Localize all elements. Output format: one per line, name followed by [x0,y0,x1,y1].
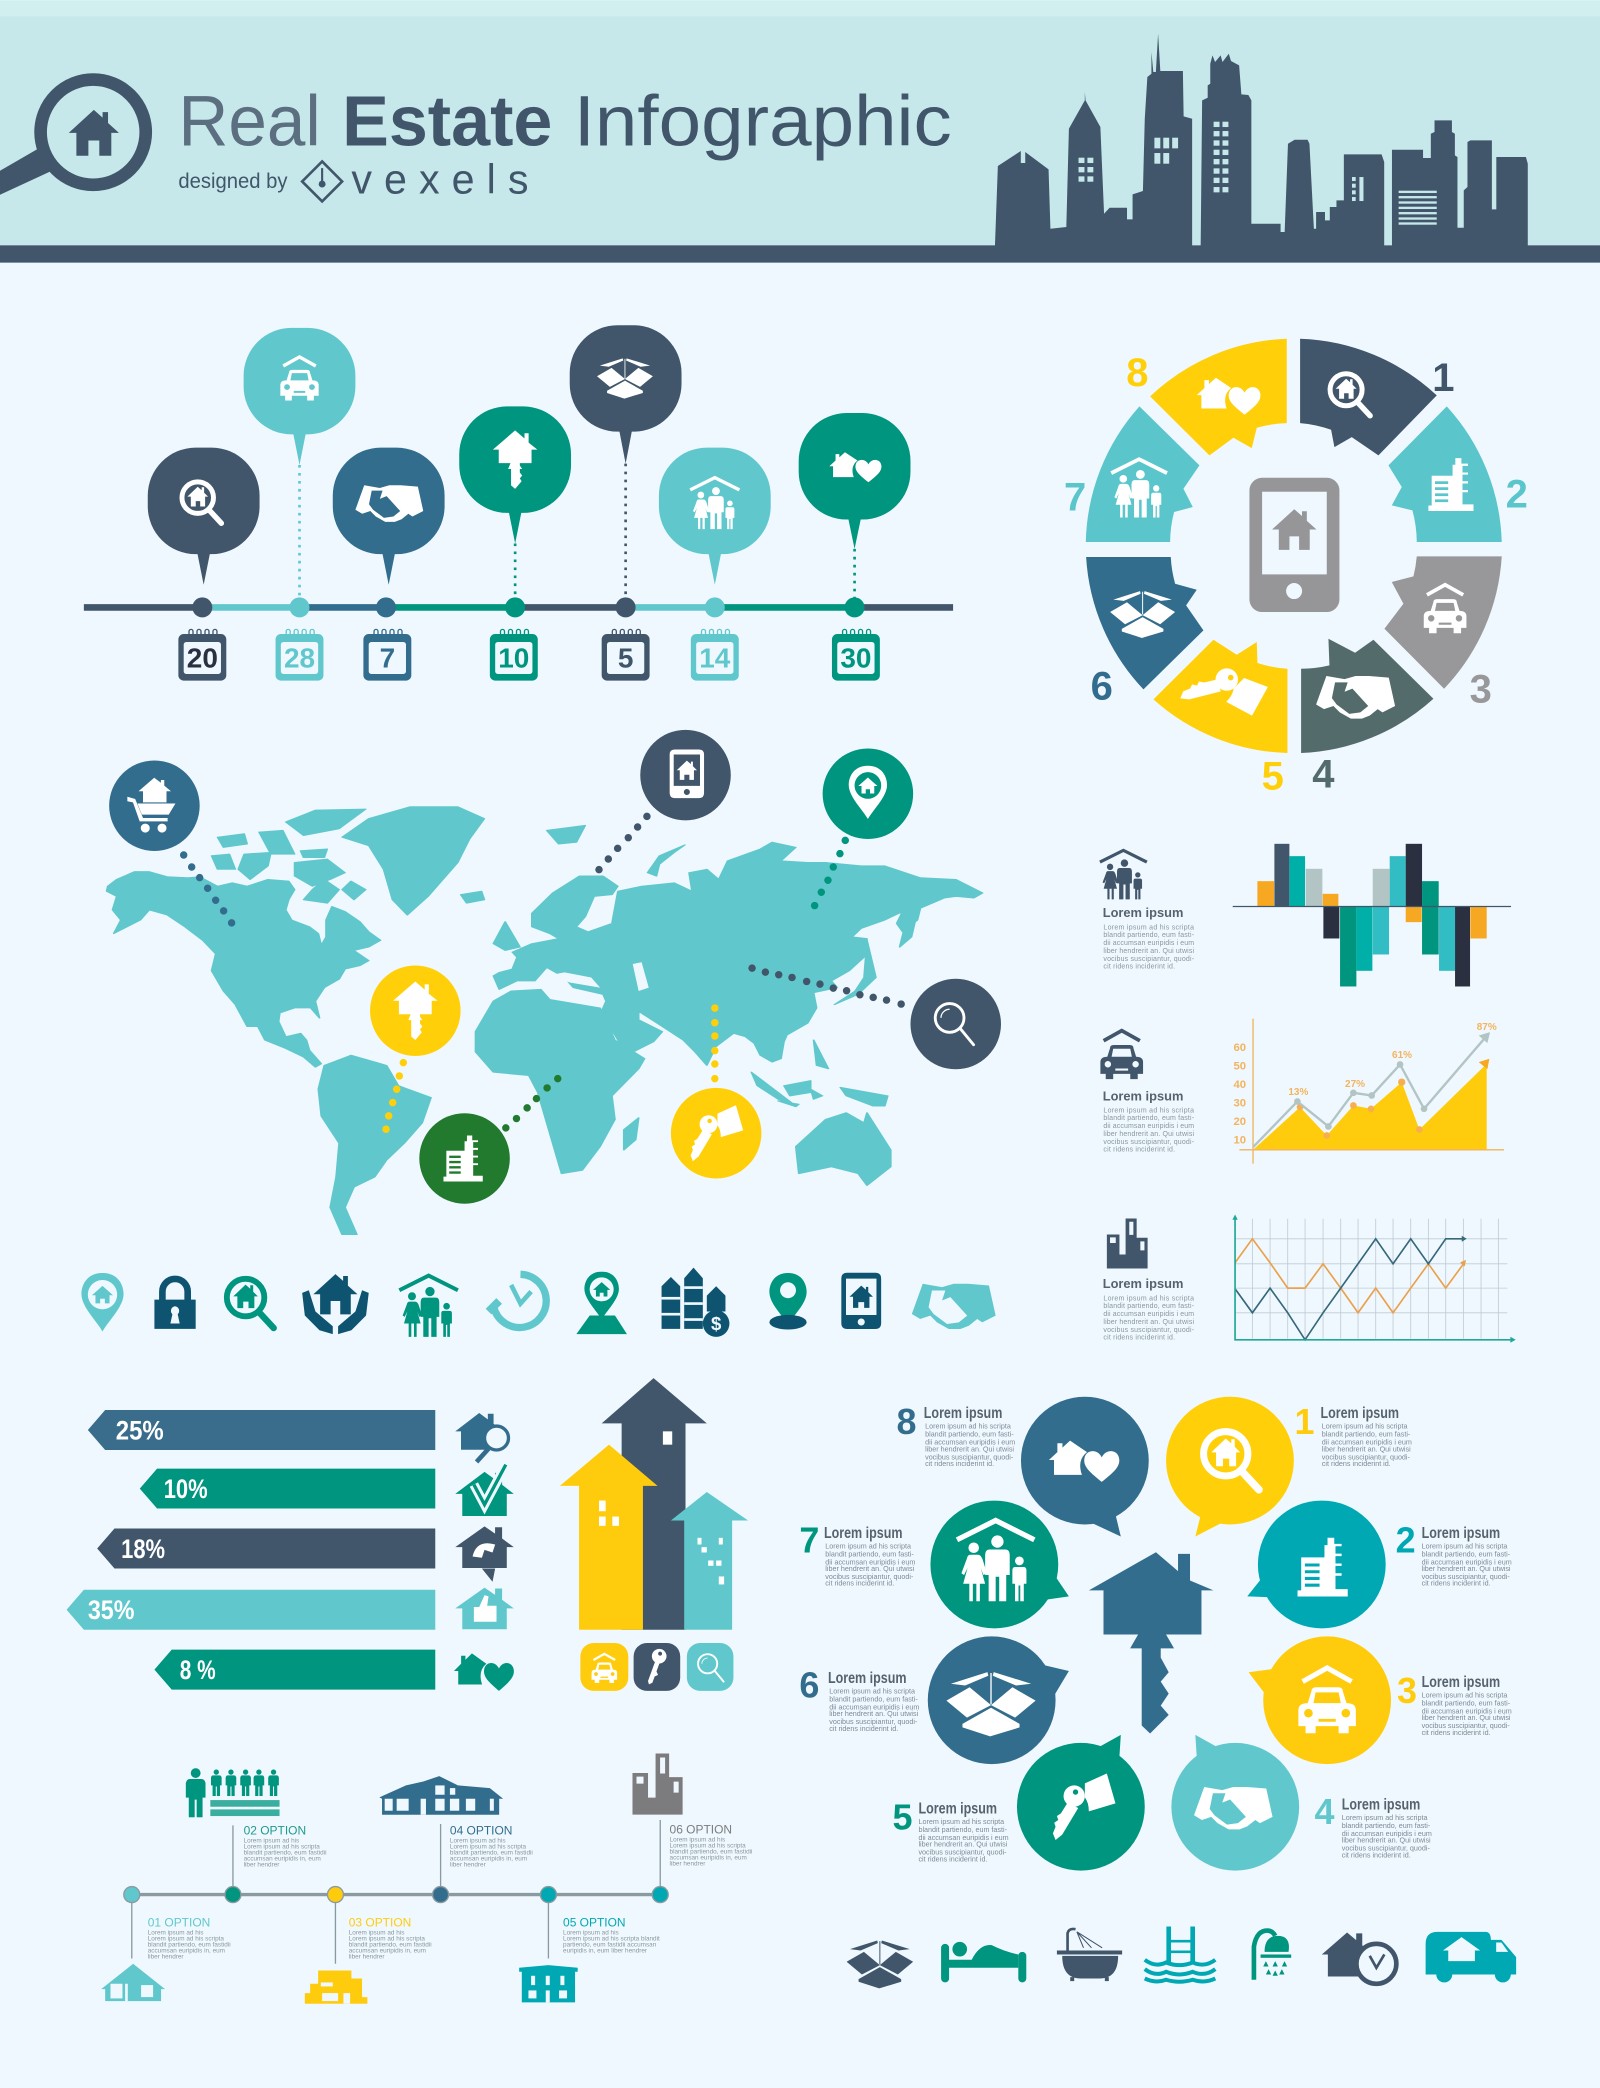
continents [107,807,983,1234]
option 02: liber hendrer [244,1862,280,1869]
option 03: Lorem ipsum ad his scripta [349,1936,425,1943]
bar: 25% [88,1410,435,1450]
bubble: house key [459,406,571,617]
icon: mansion [379,1776,503,1815]
icon: house with check [455,1465,514,1516]
block 1 [1100,850,1195,970]
option 02 [244,1824,327,1869]
center phone [1249,478,1339,612]
option 04: accumsan euripidis in, eum [450,1856,527,1863]
option 04: Lorem ipsum ad his [450,1838,506,1845]
label 3: dii accumsan euripidis i eum [1422,1708,1512,1716]
icon: house with thumb [455,1588,514,1629]
label 5: Lorem ipsum [918,1800,997,1817]
option 06 [670,1822,752,1867]
block 3: Lorem ipsum ad his scripta [1103,1295,1194,1302]
icon: house with magnifier [455,1413,508,1462]
option 05: euripidis in, eum liber hendrer [563,1947,648,1954]
label 4: cit ridens inciderint id. [1342,1851,1411,1859]
label 7: vocibus suscipiantur, quodi- [825,1573,914,1581]
timeline axis [84,605,953,610]
label 6: liber hendrerit an. Qui utwisi [829,1710,919,1718]
timeline with pin bubbles [84,325,953,681]
label 2: vocibus suscipiantur, quodi- [1422,1573,1510,1581]
calendar: 7: 7 [380,642,395,673]
label 6 [799,1665,919,1733]
label 7: Lorem ipsum [824,1525,902,1542]
calendar: 10: 10 [498,642,529,673]
label 4: blandit partiendo, eum fasti- [1342,1822,1431,1830]
segment 7: 7 [1064,475,1086,519]
label 8: Lorem ipsum ad his scripta [925,1423,1011,1431]
block 1: Lorem ipsum [1103,906,1183,920]
label 6: Lorem ipsum ad his scripta [829,1688,915,1696]
bar: 8% [154,1650,435,1690]
segment 7 [1064,406,1199,542]
option 01: liber hendrer [148,1953,184,1960]
block 2: vocibus suscipiantur, quodi- [1103,1139,1195,1146]
label 6: blandit partiendo, eum fasti- [829,1696,918,1704]
nodes [124,1887,668,1903]
option 02: blandit partiendo, eum fastidii [244,1850,327,1857]
label 2: 2 [1396,1519,1416,1560]
segment 5: 5 [1262,755,1284,799]
option 01: accumsan euripidis in, eum [148,1947,225,1954]
block 2: blandit partiendo, eum fasti- [1103,1115,1195,1122]
pin: cart [109,760,235,927]
label 1: liber hendrerit an. Qui utwisi [1322,1445,1411,1453]
block 1: dii accumsan euripidis i eum [1103,940,1194,947]
area chart: 27% [1345,1079,1365,1090]
pin: phone [595,730,731,873]
label 3 [1397,1670,1512,1737]
block 1: vocibus suscipiantur, quodi- [1103,956,1195,963]
option 01: Lorem ipsum ad his [148,1930,203,1937]
calendar: 28: 28 [284,642,315,673]
label 1: cit ridens inciderint id. [1322,1460,1391,1468]
calendar: 14: 14 [699,642,731,673]
option 06: Lorem ipsum ad his scripta [670,1842,746,1849]
growth arrows [560,1378,748,1691]
option 01: 01 OPTION [148,1916,210,1930]
label 4: dii accumsan euripidis i eum [1342,1830,1432,1838]
option 06: liber hendrer [670,1860,706,1867]
label 2: blandit partiendo, eum fasti- [1422,1550,1511,1558]
label 5: blandit partiendo, eum fasti- [918,1826,1008,1834]
label 3: 3 [1397,1670,1417,1711]
option 05: partiendo, eum fastidii accumsan [563,1941,657,1948]
label 8: vocibus suscipiantur, quodi- [925,1453,1014,1461]
header base band [0,245,1600,263]
segment 1: 1 [1432,356,1455,400]
bar: 25%: 25% [116,1415,164,1445]
arrow: light teal [671,1492,748,1630]
pin: keys with tag [671,1004,761,1178]
inland seas [547,962,649,991]
icon: teal building [519,1965,578,2002]
bubble 8 [1021,1397,1149,1537]
icon: house with clock [1322,1932,1396,1984]
option 03 [349,1916,432,1960]
label 5: vocibus suscipiantur, quodi- [918,1849,1007,1857]
title: Infographic [574,81,952,161]
block 2: Lorem ipsum ad his scripta [1103,1107,1194,1114]
designed by vexels: vexels [351,156,528,202]
label 2: cit ridens inciderint id. [1422,1580,1491,1588]
block 3: cit ridens inciderint id. [1103,1334,1175,1341]
option timeline [101,1753,752,2004]
icon: buildings with dollar [662,1268,729,1337]
percentage bars [67,1410,514,1691]
logo: magnifier with house [0,80,146,195]
area chart: 61% [1392,1050,1412,1061]
icon: clock arc [489,1274,546,1328]
icon: pool [1145,1927,1215,1982]
segment 8: 8 [1126,351,1149,395]
block 2 [1100,1031,1195,1153]
option 05: Lorem ipsum ad his scripta blandit [563,1936,660,1943]
label 8 [896,1401,1015,1468]
label 7: cit ridens inciderint id. [825,1580,894,1588]
label 8: cit ridens inciderint id. [925,1460,994,1468]
label 5: cit ridens inciderint id. [918,1855,987,1863]
label 7: blandit partiendo, eum fasti- [825,1550,914,1558]
calendar: 5 [602,629,650,681]
option 04 [450,1824,533,1869]
area chart: 20 [1233,1116,1246,1128]
ring diagram [1064,339,1528,799]
option 04: blandit partiendo, eum fastidii [450,1850,533,1857]
icon: shower [1254,1931,1291,1980]
option 06: 06 OPTION [670,1822,732,1836]
label 5: 5 [892,1796,912,1837]
label 4 [1314,1791,1432,1859]
calendar: 14 [691,629,739,681]
tile: magnifier [687,1643,733,1691]
header banner [0,0,1600,263]
icon: search house [227,1279,274,1328]
label 8: 8 [896,1401,916,1442]
icon: lock [154,1279,196,1329]
label 1: blandit partiendo, eum fasti- [1322,1431,1411,1439]
label 1 [1294,1401,1412,1468]
calendar: 10 [490,629,538,681]
label 6: vocibus suscipiantur, quodi- [829,1718,918,1726]
bar: 10% [140,1469,435,1509]
label 1: Lorem ipsum [1320,1405,1399,1422]
option 03: liber hendrer [349,1953,385,1960]
icon: light house [101,1964,165,2001]
arrow: yellow [560,1445,658,1630]
segment 2: 2 [1506,473,1528,517]
area chart [1233,1019,1504,1164]
option 02: accumsan euripidis in, eum [244,1856,321,1863]
label 8: blandit partiendo, eum fasti- [925,1431,1014,1439]
bubble: car [244,328,355,617]
option 02: 02 OPTION [244,1824,306,1838]
pin: tower [419,1075,561,1204]
label 5: liber hendrerit an. Qui utwisi [918,1841,1008,1849]
label 3: blandit partiendo, eum fasti- [1422,1700,1511,1708]
icon: family [399,1276,458,1337]
bubble 1 [1166,1397,1294,1537]
tile: key [634,1643,680,1691]
calendar: 7 [363,629,411,681]
area chart: 13% [1288,1087,1308,1098]
block 2: Lorem ipsum [1103,1089,1183,1103]
bar: 18% [97,1529,435,1568]
icon: gray buildings [632,1753,683,1815]
icon: pin on pedestal [576,1272,627,1334]
icon row 1 [81,1268,996,1337]
designed by vexels: designed by [178,169,288,193]
bubble: handshake [333,448,445,617]
arrow: dark [602,1378,707,1630]
pin: magnifier [748,964,1001,1069]
bar: 8%: 8 % [180,1655,216,1685]
bubble: box [570,325,682,617]
label 6: Lorem ipsum [828,1670,906,1687]
block 3: blandit partiendo, eum fasti- [1103,1303,1195,1310]
bar: 18%: 18% [121,1534,165,1564]
speech bubble ring [799,1397,1512,1871]
calendar: 20 [178,629,226,681]
label 1: dii accumsan euripidis i eum [1322,1439,1412,1447]
block 3 [1103,1218,1195,1341]
label 8: dii accumsan euripidis i eum [925,1439,1015,1447]
segment 5 [1153,640,1287,799]
option 06: blandit partiendo, eum fastidii [670,1848,752,1855]
segment 1 [1300,339,1455,455]
label 4: vocibus suscipiantur, quodi- [1342,1845,1430,1853]
block 2: cit ridens inciderint id. [1103,1146,1175,1153]
bar chart [1233,844,1511,986]
option 05: Lorem ipsum ad his [563,1930,619,1937]
label 1: vocibus suscipiantur, quodi- [1322,1453,1411,1461]
bar: 35%: 35% [88,1595,134,1625]
label 5 [892,1796,1009,1863]
area chart: 30 [1233,1097,1246,1109]
block 2: dii accumsan euripidis i eum [1103,1123,1194,1130]
option 05: 05 OPTION [563,1916,626,1930]
label 2: dii accumsan euripidis i eum [1422,1558,1512,1566]
skyline [995,34,1528,247]
option 05 [563,1916,660,1954]
bar: 35% [67,1590,435,1630]
label 5: Lorem ipsum ad his scripta [918,1818,1004,1826]
icon: hands holding house [302,1274,369,1334]
center house key [1089,1552,1213,1734]
bubble 7 [930,1501,1069,1628]
label 2: liber hendrerit an. Qui utwisi [1422,1565,1511,1573]
option 03: accumsan euripidis in, eum [349,1947,426,1954]
icon: location pin [81,1273,124,1332]
icon: crowd [186,1768,280,1817]
option 06: accumsan euripidis in, eum [670,1854,747,1861]
option 01 [148,1916,231,1960]
bar: 10%: 10% [164,1474,208,1504]
option 01: Lorem ipsum ad his scripta [148,1936,224,1943]
label 3: Lorem ipsum ad his scripta [1422,1692,1507,1700]
area chart: 87% [1477,1022,1497,1033]
label 7: liber hendrerit an. Qui utwisi [825,1565,915,1573]
icon: bath [1057,1929,1122,1981]
option 03: 03 OPTION [349,1916,411,1930]
charts panel [1100,844,1516,1343]
title: Estate [342,81,552,161]
icon: buildings with dollar: $ [711,1313,722,1334]
icon: yellow house [305,1970,367,2004]
label 4: Lorem ipsum ad his scripta [1342,1814,1427,1822]
label 3: Lorem ipsum [1422,1674,1500,1691]
block 1: blandit partiendo, eum fasti- [1103,932,1195,939]
area chart: 50 [1233,1060,1246,1072]
label 7 [799,1519,915,1588]
label 6: dii accumsan euripidis i eum [829,1704,919,1712]
label 7: 7 [799,1519,819,1560]
calendar: 30: 30 [840,642,871,673]
segment 6: 6 [1091,665,1113,709]
calendar: 20: 20 [187,642,218,673]
icon: map pin [769,1273,807,1330]
segment 3: 3 [1470,667,1492,711]
segment 2 [1388,406,1528,542]
area chart: 60 [1233,1042,1246,1054]
icon: phone [841,1273,881,1329]
block 1: Lorem ipsum ad his scripta [1103,924,1194,931]
option 04: 04 OPTION [450,1824,512,1838]
bubble 6 [928,1636,1069,1764]
option 03: blandit partiendo, eum fastidii [349,1941,432,1948]
title [178,81,952,161]
icon: box [847,1941,913,1988]
segment 6 [1086,557,1203,709]
option 03: Lorem ipsum ad his [349,1930,404,1937]
label 4: 4 [1314,1791,1334,1832]
designed by vexels [178,156,528,202]
icon: house with heart [454,1653,514,1691]
bubble 5 [1017,1735,1145,1871]
label 2 [1396,1519,1512,1588]
label 6: cit ridens inciderint id. [829,1725,898,1733]
area chart: 40 [1233,1079,1246,1091]
block 3: dii accumsan euripidis i eum [1103,1311,1194,1318]
bubble 3 [1249,1636,1391,1764]
label 3: cit ridens inciderint id. [1422,1729,1491,1737]
bubble 2 [1247,1501,1386,1628]
label 4: Lorem ipsum [1342,1796,1420,1813]
label 7: dii accumsan euripidis i eum [825,1558,915,1566]
calendar: 30 [832,629,880,681]
option 02: Lorem ipsum ad his [244,1838,299,1845]
block 3: liber hendrerit an. Qui utwisi [1103,1319,1194,1326]
segment 4: 4 [1312,753,1335,797]
icon row 2 [847,1927,1516,1988]
option 01: blandit partiendo, eum fastidii [148,1941,231,1948]
pin: house key [370,965,461,1133]
icon: handshake [912,1284,996,1329]
area chart: 10 [1233,1134,1246,1146]
label 1: Lorem ipsum ad his scripta [1322,1423,1408,1431]
block 3: vocibus suscipiantur, quodi- [1103,1327,1195,1334]
line chart [1232,1214,1516,1343]
bubble: family [659,448,771,617]
label 2: Lorem ipsum [1422,1525,1500,1542]
option 04: Lorem ipsum ad his scripta [450,1844,527,1851]
block 3: Lorem ipsum [1103,1277,1183,1291]
block 1: cit ridens inciderint id. [1103,963,1175,970]
segment 3 [1384,556,1502,711]
icon: van [1426,1932,1516,1982]
bubble 4 [1171,1735,1299,1871]
segment 4 [1301,639,1433,797]
axis and stems [132,1820,660,1964]
label 7: Lorem ipsum ad his scripta [825,1542,911,1550]
block 1: liber hendrerit an. Qui utwisi [1103,948,1194,955]
segment 8 [1126,339,1287,455]
icon: bed [941,1942,1026,1982]
bubble: house and heart [799,413,910,617]
world map [107,730,1001,1234]
bubble: search [148,448,260,617]
label 8: liber hendrerit an. Qui utwisi [925,1445,1014,1453]
option 06: Lorem ipsum ad his [670,1836,725,1843]
icon: house with phone [455,1526,514,1582]
label 2: Lorem ipsum ad his scripta [1422,1542,1507,1550]
label 8: Lorem ipsum [924,1405,1002,1422]
pin: location [811,748,913,909]
calendar: 28 [276,629,323,681]
label 5: dii accumsan euripidis i eum [918,1834,1009,1842]
label 3: liber hendrerit an. Qui utwisi [1422,1714,1511,1722]
label 3: vocibus suscipiantur, quodi- [1422,1722,1510,1730]
label 1: 1 [1294,1401,1314,1442]
calendar: 5: 5 [618,642,633,673]
label 4: liber hendrerit an. Qui utwisi [1342,1837,1431,1845]
option 02: Lorem ipsum ad his scripta [244,1844,320,1851]
title: Real [178,81,321,161]
tile: car [580,1643,628,1691]
label 6: 6 [799,1665,819,1706]
option 04: liber hendrer [450,1862,487,1869]
block 2: liber hendrerit an. Qui utwisi [1103,1131,1194,1138]
